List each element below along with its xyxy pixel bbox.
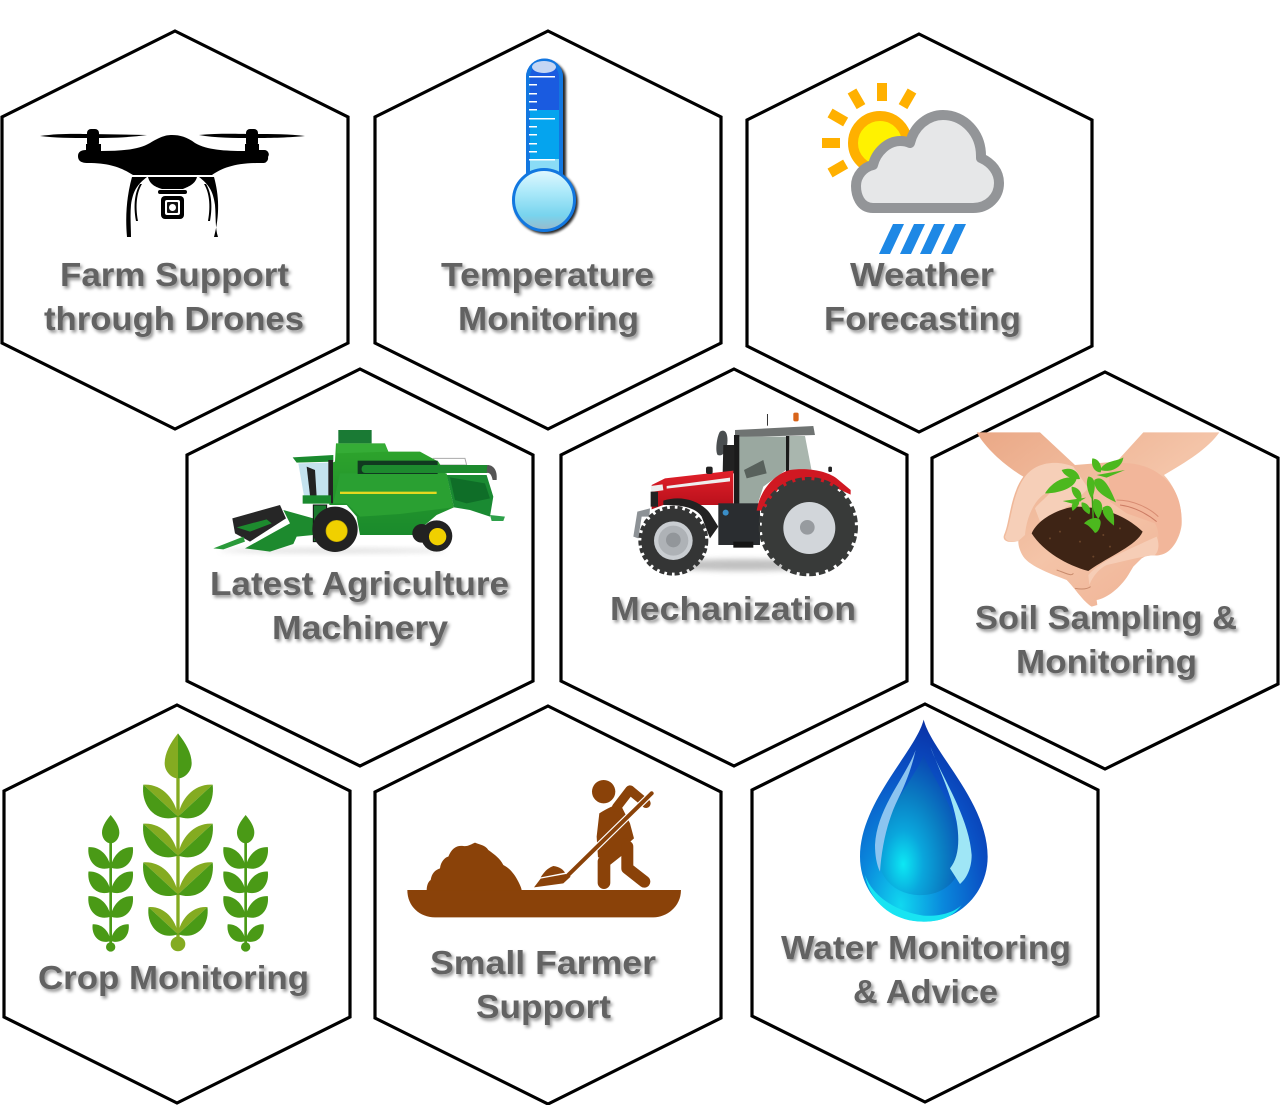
label <box>44 256 304 337</box>
label: Soil Sampling & <box>975 599 1237 636</box>
label: Water Monitoring <box>781 929 1071 966</box>
icon: red tractor <box>633 413 856 575</box>
icon: drone <box>40 129 305 237</box>
panel: Crop Monitoring <box>4 705 350 1103</box>
icon: hands holding soil and seedling <box>977 432 1219 607</box>
label: Machinery <box>272 609 449 646</box>
icon: sun cloud rain <box>822 83 999 254</box>
label: Support <box>476 988 611 1025</box>
label <box>975 599 1237 680</box>
label: through Drones <box>44 300 304 337</box>
panel: Mechanization <box>561 369 907 766</box>
icon: crop plants <box>88 733 268 952</box>
label: Small Farmer <box>430 944 656 981</box>
label: Farm Support <box>60 256 289 293</box>
panel: Weather Forecasting <box>747 34 1092 432</box>
icon: water drop <box>860 720 988 922</box>
panel: Soil Sampling & Monitoring <box>932 372 1278 769</box>
label: & Advice <box>853 973 998 1010</box>
label <box>824 256 1021 337</box>
icon: thermometer <box>514 59 578 234</box>
label: Mechanization <box>610 590 856 627</box>
label: Monitoring <box>1016 643 1197 680</box>
label: Forecasting <box>824 300 1021 337</box>
icon: farmer digging <box>407 780 681 917</box>
label <box>210 565 509 646</box>
label: Temperature <box>441 256 654 293</box>
panel: Temperature Monitoring <box>375 31 721 429</box>
label <box>430 944 656 1025</box>
label <box>441 256 654 337</box>
panel: Farm Support through Drones <box>2 31 348 429</box>
panel: Small Farmer Support <box>375 706 721 1104</box>
label: Latest Agriculture <box>210 565 509 602</box>
icon: combine harvester <box>213 430 505 553</box>
panel: Latest Agriculture Machinery <box>187 369 533 766</box>
label <box>781 929 1071 1010</box>
label: Crop Monitoring <box>38 959 309 996</box>
panel: Water Monitoring & Advice <box>752 704 1098 1102</box>
label: Monitoring <box>458 300 639 337</box>
label: Weather <box>850 256 994 293</box>
